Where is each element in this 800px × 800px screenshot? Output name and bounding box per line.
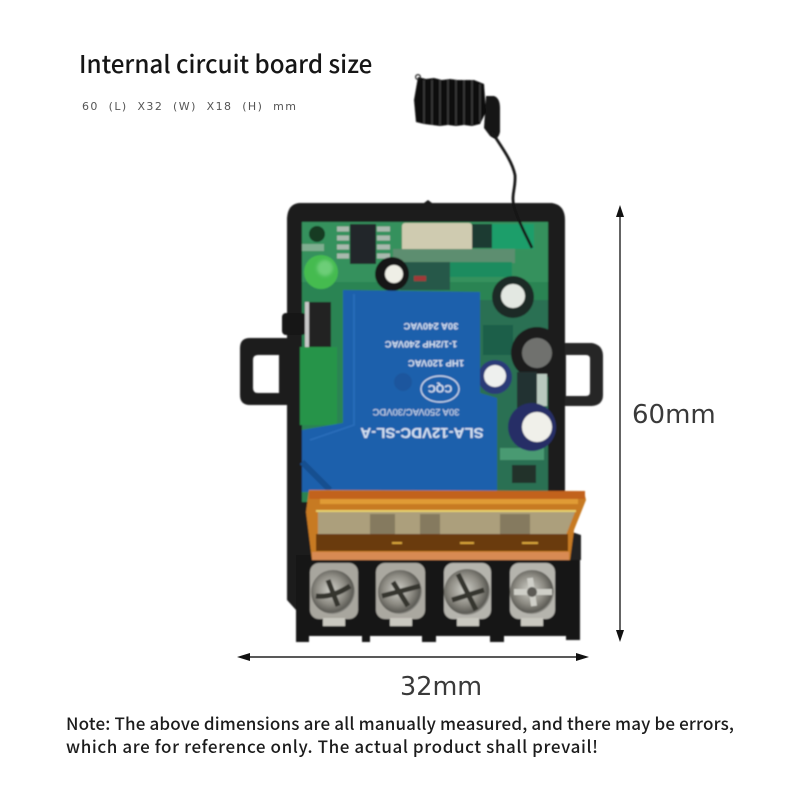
terminal screws [310,563,555,626]
push button [282,313,306,335]
arrow: horizontal 32mm dimension [237,653,589,661]
green LED [304,255,338,289]
right board section [480,300,548,500]
relay printed text: 30A 250VAC/30VDC [372,406,459,417]
capacitor blue lower [508,403,556,451]
relay printed text [360,320,484,441]
green terminal strip [300,347,337,425]
IC strip right [517,372,537,410]
board components [302,222,548,290]
label: 60mm: 60mm [632,400,716,430]
arrow: vertical 60mm dimension [616,205,624,642]
dimensions subtitle: 60 (L) X32 (W) X18 (H) mm [82,100,296,113]
capacitor large dark [511,327,563,379]
product photo: relay receiver board [240,132,603,642]
note text [66,710,734,758]
blue relay body [302,290,497,492]
note text: which are for reference only. The actual product shall prevail! [66,733,598,758]
label: 32mm: 32mm [400,672,482,702]
note text: Note: The above dimensions are all manually measured, and there may be errors, [66,710,734,735]
small electrolytic capacitor top [375,257,409,291]
icon: antenna coil [414,75,500,138]
relay printed text: SLA-12VDC-SL-A [360,424,484,441]
terminal block [296,555,580,642]
mounting ear right [560,343,603,406]
relay printed text: 1-1/2HP 240VAC [385,338,457,349]
relay printed text: CQC [428,382,452,394]
orange transparent cover [306,490,586,560]
black housing [287,200,565,610]
relay printed text: 1HP 120VAC [408,357,464,368]
capacitor upper right [492,276,534,318]
capacitor small blue [478,360,512,394]
relay printed text: 30A 240VAC [403,320,458,331]
mounting ear left [240,338,290,405]
green circuit board [302,222,548,502]
wire from coil to board [492,132,532,248]
title: Internal circuit board size [79,45,372,80]
